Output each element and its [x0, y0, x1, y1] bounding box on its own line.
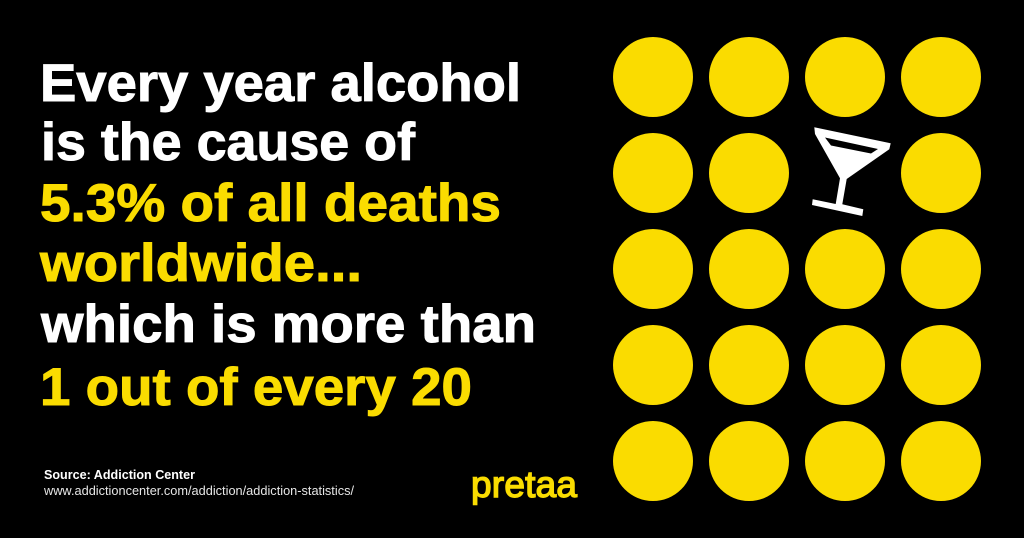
headline: which is more than — [40, 295, 536, 354]
headline — [39, 54, 536, 417]
headline: is the cause of — [41, 113, 415, 172]
logo: pretaa: pretaa — [471, 464, 577, 505]
headline: 5.3% of all deaths — [40, 174, 501, 233]
headline: 1 out of every 20 — [40, 358, 472, 417]
headline: Every year alcohol — [40, 54, 521, 113]
headline: worldwide... — [39, 234, 362, 293]
source credit: Source: Addiction Center — [44, 467, 195, 482]
icon: cocktail glass — [812, 127, 891, 216]
dot grid: 19 of 20 circles — [613, 37, 981, 501]
source credit — [43, 467, 354, 498]
source credit: www.addictioncenter.com/addiction/addiction-statistics/ — [43, 483, 354, 498]
